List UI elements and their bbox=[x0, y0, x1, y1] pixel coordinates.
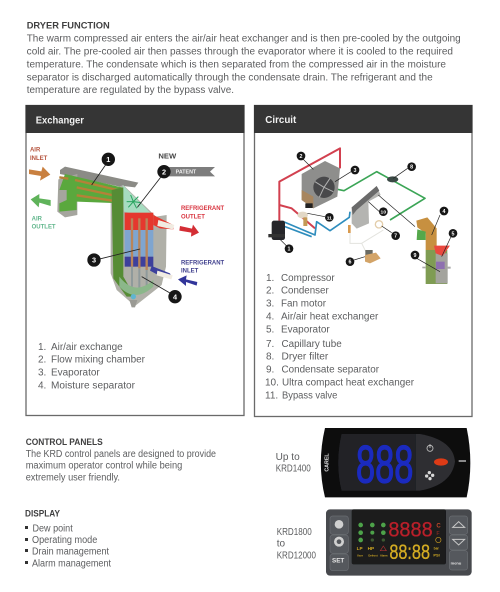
list: circuit parts: Bypass valve bbox=[282, 390, 338, 401]
number: 2 bbox=[157, 165, 171, 178]
list: circuit parts: 11. bbox=[265, 390, 278, 401]
controller: KRD1800 to KRD12000 bbox=[277, 509, 472, 576]
text block: control panels description: The KRD control panels are designed to provide bbox=[26, 449, 216, 460]
list: circuit parts: 9. bbox=[266, 365, 274, 376]
pipes: red bbox=[279, 148, 340, 228]
list: display items: Dew point bbox=[32, 523, 73, 534]
list: circuit parts: 2. bbox=[266, 286, 274, 297]
section: dryer function bbox=[27, 20, 461, 96]
tag: patent bbox=[167, 167, 215, 176]
component: compressor bbox=[268, 221, 285, 240]
number: 9 bbox=[411, 251, 419, 259]
list: display items: Alarm management bbox=[32, 558, 111, 569]
number: 10 bbox=[379, 207, 388, 216]
component: dryer filter bbox=[387, 176, 398, 182]
digits: yellow: 88:88 bbox=[389, 540, 430, 564]
list: circuit parts: 8. bbox=[266, 352, 274, 363]
label: up to KRD1400: Up to bbox=[276, 452, 300, 463]
text block: control panels description bbox=[26, 449, 216, 483]
panel: multi-colour LED controller bbox=[326, 509, 472, 576]
indicators: LP HP: HP bbox=[368, 546, 374, 551]
number: 7 bbox=[391, 231, 400, 240]
list: circuit parts: Compressor bbox=[281, 273, 335, 284]
list: exchanger parts: Air/air exchange bbox=[51, 342, 123, 353]
list: display items: Drain management bbox=[32, 547, 109, 558]
label: air outlet: AIR bbox=[32, 217, 43, 223]
number: 1 bbox=[102, 153, 115, 166]
indicators: LP HP: LP bbox=[357, 546, 363, 551]
list: circuit parts: 7. bbox=[266, 339, 274, 350]
evaporator bbox=[125, 213, 153, 230]
digits: red: 8888 bbox=[388, 518, 433, 542]
number: 1: 1 bbox=[106, 155, 110, 164]
panel header: circuit: Circuit bbox=[265, 114, 297, 126]
label: up to KRD1400 bbox=[276, 452, 311, 475]
section: control panels bbox=[26, 437, 216, 483]
number: 8 bbox=[407, 162, 416, 171]
number: 3: 3 bbox=[354, 168, 357, 174]
label: up to KRD1400: KRD1400 bbox=[276, 464, 311, 475]
text block: control panels description: maximum operator control while being bbox=[26, 461, 182, 472]
component: capillary tube bbox=[375, 221, 383, 228]
pipes: blue bbox=[283, 212, 350, 237]
number: 11: 11 bbox=[327, 215, 332, 221]
component: ultra compact heat exchanger bbox=[348, 186, 381, 233]
list: display items bbox=[25, 523, 111, 569]
number: 9: 9 bbox=[414, 253, 417, 259]
list: circuit parts: Condenser bbox=[281, 286, 329, 297]
units: F bbox=[436, 531, 440, 537]
leader lines bbox=[92, 163, 172, 294]
list: exchanger parts: 1. bbox=[38, 342, 46, 353]
icon: fan bbox=[425, 471, 434, 480]
number: 4: 4 bbox=[173, 292, 178, 301]
label: KRD1800 to KRD12000: KRD1800 bbox=[277, 527, 312, 538]
arrow: refrigerant outlet bbox=[179, 225, 199, 237]
number: 2: 2 bbox=[162, 167, 166, 176]
arrow: air outlet bbox=[31, 194, 51, 207]
number: 2 bbox=[297, 152, 305, 160]
label: refrigerant inlet: REFRIGERANT bbox=[181, 260, 225, 266]
list: circuit parts: Ultra compact heat exchanger bbox=[282, 377, 415, 388]
label: air inlet: AIR bbox=[30, 148, 41, 154]
list: circuit parts: 10. bbox=[265, 377, 279, 388]
text block: dryer function description: cold air. The pre-cooled air then passes through the evaporator where it is cooled to the required bbox=[27, 46, 453, 57]
label: air inlet: INLET bbox=[30, 156, 48, 162]
controller: up to KRD1400 bbox=[276, 428, 470, 497]
number: 10: 10 bbox=[381, 210, 386, 216]
heading: dryer function: DRYER FUNCTION bbox=[27, 20, 110, 32]
label: refrigerant outlet: OUTLET bbox=[181, 214, 205, 220]
list: circuit parts: Capillary tube bbox=[282, 339, 342, 350]
panel: circuit bbox=[254, 105, 472, 416]
list: circuit parts: 3. bbox=[266, 299, 274, 310]
number: 2: 2 bbox=[300, 154, 303, 160]
units bbox=[433, 524, 441, 558]
list: display items: Operating mode bbox=[32, 535, 98, 546]
number: 5: 5 bbox=[452, 231, 455, 237]
logo: carel: CAREL bbox=[325, 453, 331, 472]
air tubes bbox=[59, 174, 122, 212]
section: display bbox=[25, 508, 111, 569]
list: exchanger parts: 4. bbox=[38, 381, 46, 392]
label: air outlet: OUTLET bbox=[32, 225, 56, 231]
component: moisture separator assembly bbox=[416, 217, 451, 284]
housing bbox=[60, 167, 138, 187]
number: 3 bbox=[351, 166, 359, 174]
indicator: alarm bbox=[380, 546, 386, 551]
list: exchanger parts: Moisture separator bbox=[51, 381, 136, 392]
mixing chamber symbol bbox=[127, 195, 141, 208]
indicators: LP HP: Defrost bbox=[368, 554, 378, 558]
panel: blue LED controller bbox=[321, 428, 470, 497]
buttons: right bbox=[449, 516, 468, 570]
arrow: air inlet bbox=[29, 167, 50, 181]
icons: buttons bbox=[334, 520, 344, 547]
list: exchanger parts: Evaporator bbox=[51, 368, 100, 379]
panel header: exchanger: Exchanger bbox=[36, 114, 84, 126]
label: set: SET bbox=[332, 557, 344, 564]
label: new: NEW bbox=[158, 152, 177, 161]
number: 6 bbox=[346, 257, 354, 266]
digits: blue: 888 bbox=[356, 436, 413, 495]
label: refrigerant inlet bbox=[181, 260, 225, 275]
list: circuit parts: Evaporator bbox=[281, 324, 330, 335]
number: 3 bbox=[87, 253, 101, 267]
number: 6: 6 bbox=[349, 260, 352, 266]
list: exchanger parts: 2. bbox=[38, 355, 46, 366]
heading: control panels: CONTROL PANELS bbox=[26, 437, 103, 448]
label: refrigerant outlet bbox=[181, 206, 225, 220]
label: air inlet bbox=[30, 148, 48, 162]
label: KRD1800 to KRD12000 bbox=[277, 527, 316, 561]
text block: dryer function description bbox=[27, 34, 461, 96]
label: air outlet bbox=[32, 217, 56, 231]
diagram: refrigeration circuit bbox=[268, 148, 457, 284]
indicators: green bbox=[358, 523, 386, 542]
list: circuit parts: 5. bbox=[266, 324, 274, 335]
label: refrigerant inlet: INLET bbox=[181, 269, 199, 275]
moisture separator bbox=[119, 277, 153, 295]
pipes: green bbox=[337, 172, 425, 220]
number: 3: 3 bbox=[92, 256, 96, 265]
text block: dryer function description: The warm compressed air enters the air/air heat exchanger and is then pre-cooled by the outgoing bbox=[27, 34, 461, 45]
buttons: left bbox=[330, 516, 348, 571]
panel: exchanger bbox=[26, 105, 244, 416]
list: circuit parts bbox=[265, 273, 415, 401]
units: bar bbox=[434, 546, 440, 550]
button: red bbox=[434, 458, 448, 466]
label: refrigerant outlet: REFRIGERANT bbox=[181, 206, 225, 212]
list: circuit parts: Air/air heat exchanger bbox=[281, 312, 379, 323]
leader lines bbox=[280, 159, 451, 272]
diagram: air heat exchanger bbox=[29, 148, 225, 307]
list: exchanger parts: 3. bbox=[38, 368, 46, 379]
units: PSI bbox=[433, 553, 440, 558]
tag: patent: PATENT bbox=[176, 170, 197, 176]
list: exchanger parts: Flow mixing chamber bbox=[51, 355, 146, 366]
list: exchanger parts bbox=[38, 342, 146, 392]
text block: dryer function description: temperature. The condensate which is then separated from the compressed air in the moisture bbox=[27, 59, 446, 70]
number: 11 bbox=[325, 213, 334, 222]
component: condenser bbox=[302, 161, 340, 208]
number: 7: 7 bbox=[394, 234, 397, 240]
list: circuit parts: Dryer filter bbox=[282, 352, 329, 363]
number: 8: 8 bbox=[410, 165, 413, 171]
pipes: capillary bbox=[350, 225, 383, 253]
list: circuit parts: Condensate separator bbox=[282, 365, 380, 376]
units: C bbox=[436, 524, 441, 530]
list: circuit parts: Fan motor bbox=[281, 299, 327, 310]
number: 1 bbox=[285, 244, 293, 253]
panel header: circuit bbox=[254, 105, 472, 133]
text block: dryer function description: temperature are regulated by the bypass valve. bbox=[27, 85, 234, 96]
label: KRD1800 to KRD12000: to bbox=[277, 539, 285, 550]
label: menu: menu bbox=[451, 561, 462, 566]
indicators: LP HP: User bbox=[357, 554, 363, 558]
heading: display: DISPLAY bbox=[25, 508, 61, 519]
list: circuit parts: 4. bbox=[266, 312, 274, 323]
panel header: exchanger bbox=[26, 105, 244, 133]
component: valve 6 bbox=[365, 250, 381, 263]
text block: dryer function description: separator is discharged automatically through the condensate drain. The refrigerant and the bbox=[27, 72, 433, 83]
indicators: LP HP: Alarm bbox=[380, 554, 388, 558]
component: bypass valve bbox=[297, 212, 308, 226]
icon: power bbox=[427, 444, 433, 451]
number: 4 bbox=[440, 207, 448, 215]
number: 1: 1 bbox=[288, 247, 291, 253]
arrow: refrigerant inlet bbox=[178, 275, 197, 286]
number: 4: 4 bbox=[443, 209, 446, 215]
label: KRD1800 to KRD12000: KRD12000 bbox=[277, 550, 316, 561]
indicators: LP HP bbox=[357, 546, 388, 558]
number: 4 bbox=[168, 290, 182, 303]
text block: control panels description: extremely user friendly. bbox=[26, 472, 120, 483]
list: circuit parts: 1. bbox=[266, 273, 274, 284]
number: 5 bbox=[449, 229, 457, 238]
